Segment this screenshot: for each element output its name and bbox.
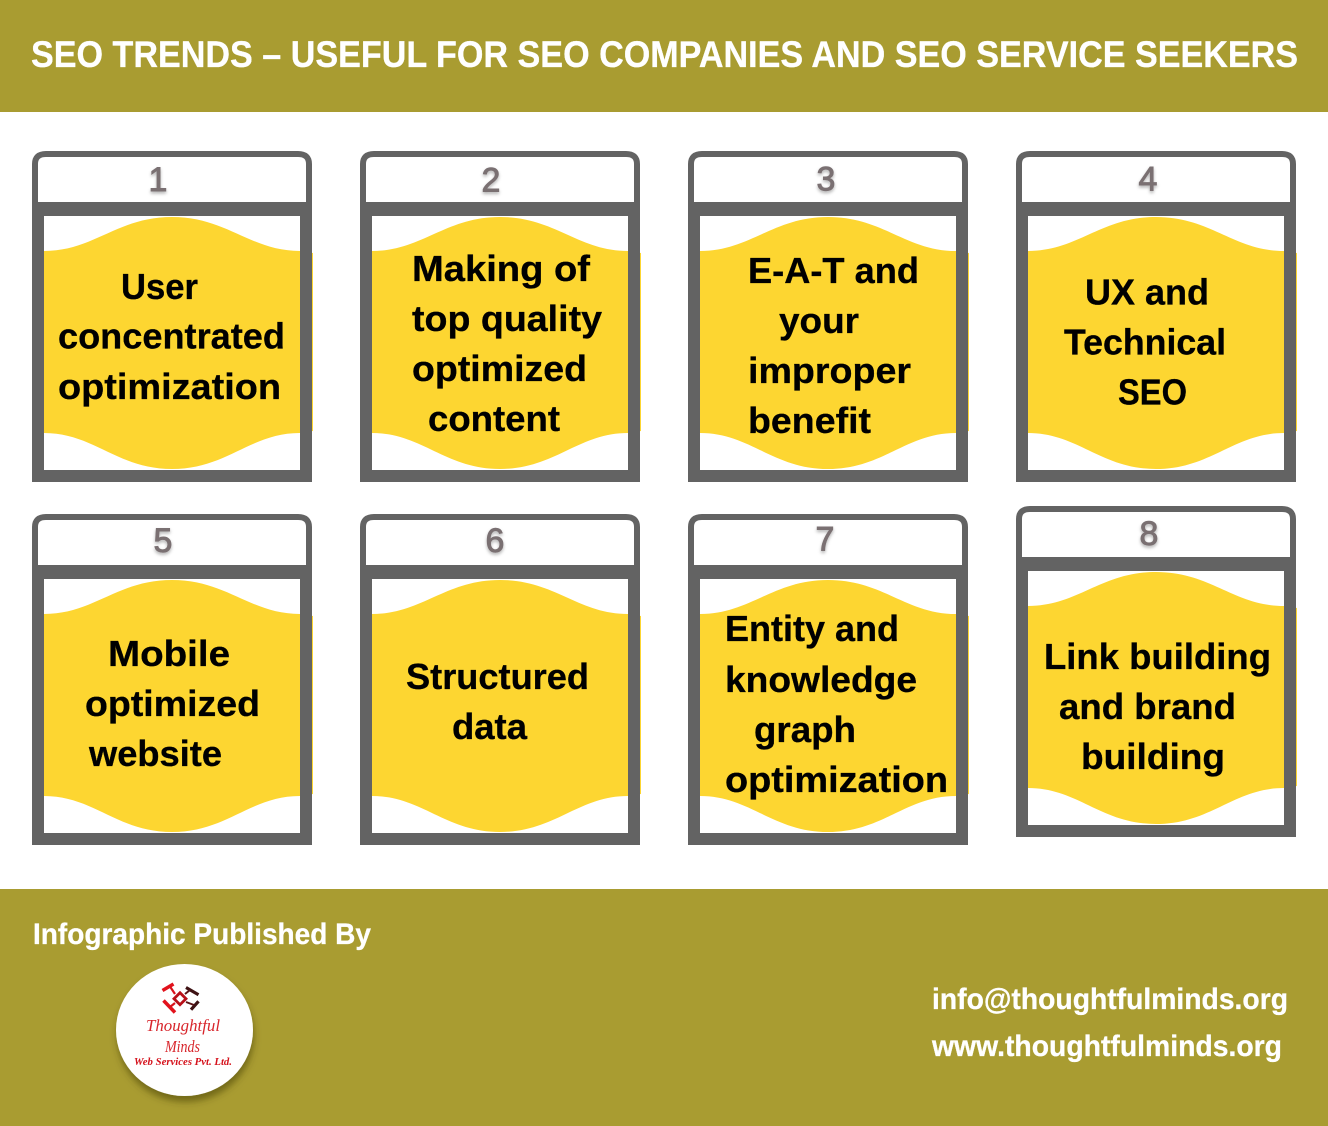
text: card 2 <box>412 248 602 439</box>
logo wordmark: Minds <box>164 1037 200 1056</box>
text: card 3 <box>748 250 919 441</box>
text: card 5: optimized <box>85 683 260 724</box>
text: card 5: website <box>88 733 222 774</box>
text: card 1: concentrated <box>58 316 285 356</box>
logo wordmark: Thoughtful <box>146 1016 220 1035</box>
text: card 1: User <box>121 266 198 307</box>
text: card 3: improper <box>748 350 911 391</box>
card 1 <box>32 154 313 482</box>
card 2 <box>360 154 641 482</box>
number 8: 8 <box>1140 515 1158 553</box>
text: card 1: optimization <box>58 366 281 407</box>
text: card 8: and brand <box>1059 686 1236 727</box>
text: card 4: UX and <box>1085 272 1209 312</box>
contact website: www.thoughtfulminds.org <box>931 1030 1282 1063</box>
header band <box>0 0 1328 112</box>
text: card 7: graph <box>754 709 856 750</box>
text: card 6: data <box>452 706 528 747</box>
contact email: info@thoughtfulminds.org <box>932 983 1288 1016</box>
icon: logo mark <box>162 984 198 1012</box>
number 4: 4 <box>1139 160 1157 198</box>
footer band <box>0 889 1328 1126</box>
text: card 4: SEO <box>1118 372 1187 412</box>
text: card 8: Link building <box>1044 636 1271 677</box>
text: card 4 <box>1064 272 1226 412</box>
number 7: 7 <box>816 520 834 558</box>
card 6 <box>360 517 641 845</box>
card 7 <box>688 517 969 845</box>
text: card 3: benefit <box>748 400 871 441</box>
logo wordmark: Web Services Pvt. Ltd. <box>134 1057 232 1068</box>
card 5 <box>32 517 313 845</box>
text: card 5 <box>85 633 260 774</box>
text: card 2: content <box>428 398 560 439</box>
logo wordmark <box>134 1016 232 1068</box>
text: card 5: Mobile <box>108 633 230 674</box>
card 4 <box>1016 154 1297 482</box>
text: card 4: Technical <box>1064 322 1226 362</box>
text: card 7: knowledge <box>725 659 917 700</box>
text: card 3: your <box>779 300 859 341</box>
text: card 7: optimization <box>725 759 948 800</box>
text: card 7: Entity and <box>725 608 899 649</box>
text: card 7 <box>725 608 948 800</box>
number 2: 2 <box>482 162 500 200</box>
card 8 <box>1016 509 1297 837</box>
text: card 6: Structured <box>406 656 589 697</box>
number 5: 5 <box>154 522 172 560</box>
number 1: 1 <box>149 161 167 199</box>
text: card 2: Making of <box>412 248 591 289</box>
text: card 1 <box>58 266 285 407</box>
text: card 8: building <box>1081 736 1225 777</box>
number 6: 6 <box>486 522 504 560</box>
text: card 3: E-A-T and <box>748 250 919 291</box>
text: card 2: top quality <box>412 298 602 339</box>
text: card 6 <box>406 656 589 747</box>
text: card 2: optimized <box>412 348 587 389</box>
number 3: 3 <box>817 160 835 198</box>
text: card 8 <box>1044 636 1271 777</box>
logo badge <box>116 964 253 1096</box>
publisher heading: Infographic Published By <box>33 918 371 951</box>
card 3 <box>688 154 969 482</box>
